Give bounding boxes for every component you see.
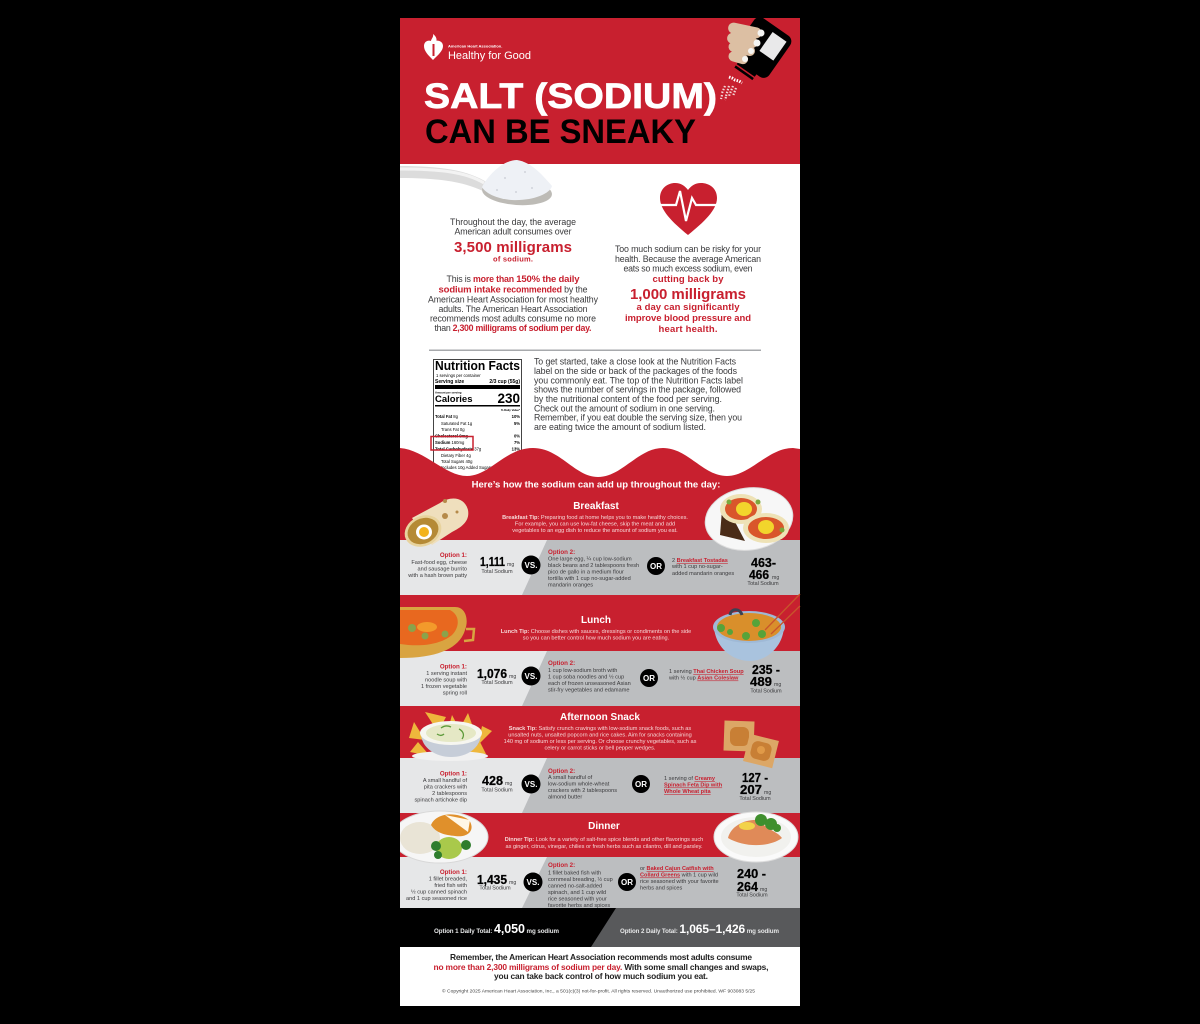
total: 463-466 mg: mg	[772, 575, 779, 581]
option 1: snack: spinach artichoke dip	[414, 798, 467, 804]
option 1: lunch: noodle soup with	[425, 678, 467, 684]
option 2: snack	[548, 768, 617, 800]
nutrition facts label: 7%	[514, 440, 520, 445]
daily totals bar	[400, 908, 800, 947]
badge: or	[618, 873, 636, 891]
option 2: lunch: stir-fry vegetables and edamame	[548, 688, 629, 694]
icon: noodle bowl	[713, 594, 800, 661]
total: 428 mg: 428	[482, 774, 503, 788]
title: SALT (SODIUM)	[424, 77, 717, 116]
option 2: dinner: rice seasoned with your	[548, 896, 607, 902]
snack tip	[504, 726, 697, 752]
nutrition facts label: 13%	[512, 446, 520, 452]
alternative: spinach feta dip	[664, 776, 723, 795]
option 1: lunch	[421, 664, 467, 696]
icon: burrito	[399, 499, 468, 553]
text block: average consumption: This is more than 150% the daily	[446, 274, 580, 285]
text block: average consumption: 3,500 milligrams	[454, 239, 572, 256]
nutrition facts label: Calories	[435, 394, 472, 405]
badge: or	[640, 669, 658, 687]
total: 240-264 mg: Total Sodium	[736, 892, 768, 898]
icon: breakfast tostadas plate	[701, 482, 797, 556]
logo: American Heart Association Healthy for Good: Healthy for Good	[448, 50, 531, 62]
option 2: dinner: favorite herbs and spices	[548, 903, 610, 909]
alternative: spinach feta dip: Spinach Feta Dip with	[664, 782, 723, 788]
option 1: snack: Option 1:	[440, 770, 467, 778]
nutrition facts label: Saturated Fat 1g	[441, 421, 473, 426]
badge: vs	[522, 666, 540, 686]
closing message: no more than 2,300 milligrams of sodium per day. With some small changes and swaps,	[434, 962, 768, 972]
text block: health risk: 1,000 milligrams	[630, 286, 746, 303]
text block: average consumption: adults. The American Heart Association	[438, 304, 588, 314]
total: 127-207 mg	[739, 771, 771, 802]
option 1: dinner	[406, 869, 467, 902]
total: 463-466 mg	[747, 556, 779, 587]
text block: average consumption: sodium intake recommended by the	[438, 284, 588, 296]
text block: average consumption: than 2,300 milligrams of sodium per day.	[434, 323, 592, 333]
option 1: dinner: Option 1:	[440, 869, 467, 876]
nutrition facts label: Serving size	[435, 379, 464, 385]
badge: vs	[522, 556, 540, 574]
nutrition facts label: Amount per serving	[435, 390, 462, 394]
option 1: lunch: 1 serving instant	[426, 671, 467, 677]
icon: chips and dip	[409, 712, 492, 761]
option 2 daily total: Option 2 Daily Total: 1,065–1,426 mg sodium	[620, 922, 779, 936]
alternative: breakfast tostadas: 2 Breakfast Tostadas	[672, 558, 728, 564]
total: 428 mg	[481, 774, 513, 794]
option 2: breakfast: One large egg, ¼ cup low-sodium	[548, 556, 632, 562]
total: 1,076 mg: mg	[509, 674, 516, 680]
closing message: Remember, the American Heart Association recommends most adults consume	[450, 952, 752, 962]
total: 428 mg: Total Sodium	[481, 788, 513, 794]
text block: health risk: heart health.	[658, 324, 718, 335]
nutrition facts label: Trans Fat 0g	[441, 427, 465, 432]
badge: vs	[522, 774, 540, 794]
nutrition facts label: 10%	[512, 414, 520, 419]
badge: or: OR	[635, 780, 647, 789]
option 1: lunch: spring roll	[443, 690, 467, 696]
total: 1,076 mg: Total Sodium	[481, 680, 513, 686]
snack tip: 140 mg of sodium or less per serving. Or choose crunchy vegetables, such as	[504, 739, 697, 745]
text block: average consumption	[428, 217, 599, 333]
lunch tip: so you can better control how much sodium you are eating.	[523, 636, 670, 642]
option 2: dinner: spinach, and 1 cup wild	[548, 890, 606, 896]
alternative: spinach feta dip: 1 serving of Creamy	[664, 776, 716, 782]
option 2: lunch: 1 cup soba noodles and ½ cup	[548, 674, 624, 680]
text block: nutrition label guidance: by the nutritional content of the food per serving.	[534, 394, 722, 404]
logo: American Heart Association Healthy for Good	[424, 34, 531, 62]
total: 240-264 mg	[736, 867, 768, 898]
total: 1,111 mg: 1,111	[480, 555, 505, 569]
total: 1,111 mg: Total Sodium	[481, 569, 513, 575]
breakfast tip: For example, you can use low-fat cheese, skip the meat and add	[515, 522, 675, 528]
option 1 daily total: Option 1 Daily Total: 4,050 mg sodium	[434, 922, 559, 936]
alternative: baked cajun catfish: rice seasoned with your favorite	[640, 879, 719, 885]
heading: sodium adds up: Here’s how the sodium can add up throughout the day:	[472, 480, 720, 490]
option 2: breakfast	[548, 549, 639, 588]
option 2: snack: low-sodium whole-wheat	[548, 782, 610, 788]
text block: health risk: health. Because the average American	[615, 254, 761, 264]
nutrition facts label: Total Carbohydrate 37g	[435, 446, 482, 452]
nutrition facts label: Includes 10g Added Sugars	[441, 465, 492, 470]
heading: dinner: Dinner	[588, 821, 620, 832]
icon: fried fish plate	[392, 811, 488, 863]
total: 463-466 mg: 466	[749, 568, 769, 582]
text block: nutrition label guidance: To get started, take a close look at the Nutrition Facts	[534, 356, 737, 366]
total: 1,435 mg: Total Sodium	[479, 886, 511, 892]
option 2: dinner: canned no-salt-added	[548, 884, 602, 890]
badge: vs: VS.	[525, 780, 537, 789]
text block: health risk: Too much sodium can be risky for your	[615, 244, 761, 254]
nutrition facts label: Nutrition Facts	[435, 359, 520, 373]
option 2: snack: A small handful of	[548, 775, 593, 781]
total: 127-207 mg: mg	[764, 790, 771, 796]
lunch tip	[501, 629, 691, 642]
total: 1,076 mg	[477, 667, 516, 686]
dinner comparison band	[400, 857, 800, 908]
logo: American Heart Association Healthy for Good: American Heart Association.	[448, 44, 502, 48]
alternative: spinach feta dip: Whole Wheat pita	[664, 789, 712, 795]
nutrition facts label: Cholesterol 0mg	[435, 434, 468, 438]
dinner tip	[505, 837, 703, 850]
icon: hand shaking salt bottle	[721, 14, 794, 100]
option 1: lunch: Option 1:	[440, 664, 467, 670]
breakfast tip: Breakfast Tip: Preparing food at home helps you to make healthy choices.	[502, 515, 688, 521]
total: 235-489 mg: mg	[774, 682, 781, 688]
heading: afternoon snack: Afternoon Snack	[560, 712, 640, 723]
icon: spoon of salt	[400, 160, 553, 207]
option 1: dinner: and 1 cup seasoned rice	[406, 896, 467, 902]
option 2: lunch	[548, 660, 631, 694]
option 1: breakfast: Option 1:	[440, 552, 467, 559]
panel: dinner	[392, 811, 800, 909]
option 2: snack: Option 2:	[548, 768, 575, 775]
text block: average consumption: recommends most adults consume no more	[430, 314, 596, 324]
total: 235-489 mg: 489	[750, 675, 772, 689]
total: 1,111 mg: mg	[507, 562, 514, 568]
breakfast tip: vegetables to an egg dish to reduce the amount of sodium you eat.	[512, 528, 678, 534]
panel: afternoon snack	[400, 712, 800, 813]
total: 463-466 mg: Total Sodium	[747, 581, 779, 587]
text block: nutrition label guidance: Check out the amount of sodium in one serving.	[534, 404, 715, 414]
breakfast tip	[502, 515, 688, 534]
total: 1,076 mg: 1,076	[477, 667, 507, 681]
total: 1,435 mg: 1,435	[477, 873, 507, 887]
total: 240-264 mg: mg	[760, 887, 767, 893]
alternative: breakfast tostadas	[671, 558, 734, 577]
badge: vs	[524, 872, 542, 892]
icon: heart with pulse line	[660, 183, 717, 235]
alternative: thai chicken soup: with ½ cup Asian Coleslaw	[668, 674, 739, 682]
option 2: snack: crackers with 2 tablespoons	[548, 788, 617, 794]
option 1: snack: A small handful of	[423, 778, 467, 784]
option 1: breakfast	[407, 552, 467, 579]
badge: or: OR	[621, 878, 633, 887]
total: 240-264 mg: 264	[737, 880, 758, 894]
option 2: dinner	[548, 862, 613, 909]
option 1: breakfast: with a hash brown patty	[407, 573, 467, 579]
alternative: baked cajun catfish: Collard Greens with 1 cup wild	[640, 872, 718, 878]
icon: soup pan	[400, 607, 474, 658]
badge: vs: VS.	[527, 878, 539, 887]
alternative: baked cajun catfish: or Baked Cajun Catfish with	[640, 866, 714, 872]
text block: health risk: improve blood pressure and	[625, 313, 751, 324]
text block: average consumption: American adult consumes over	[454, 226, 572, 236]
badge: or: OR	[643, 674, 655, 683]
title: CAN BE SNEAKY	[425, 113, 696, 151]
red wave section	[400, 448, 800, 908]
text block: average consumption: of sodium.	[493, 254, 533, 264]
panel: lunch	[400, 594, 800, 706]
alternative: breakfast tostadas: added mandarin oranges	[672, 571, 734, 577]
option 1: dinner: ½ cup canned spinach	[411, 888, 467, 896]
total: 127-207 mg: Total Sodium	[739, 796, 771, 802]
copyright: © Copyright 2025 American Heart Association, Inc., a 501(c)(3) not-for-profit. All rights reserved. Unauthorized use prohibited. WF 903083 5/25	[442, 988, 755, 994]
snack tip: Snack Tip: Satisfy crunch cravings with low-sodium snack foods, such as	[509, 726, 691, 732]
closing message: you can take back control of how much sodium you eat.	[494, 971, 708, 981]
text block: nutrition label guidance	[534, 356, 743, 432]
nutrition facts label	[431, 359, 522, 480]
option 2: lunch: Option 2:	[548, 660, 575, 667]
option 2: breakfast: Option 2:	[548, 549, 575, 556]
option 2: breakfast: pico de gallo in a medium flour	[548, 570, 624, 576]
title	[424, 77, 717, 151]
text block: nutrition label guidance: label on the side or back of the packages of the foods	[534, 366, 738, 376]
snack tip: unsalted nuts, unsalted popcorn and rice cakes. Aim for snacks containing	[508, 732, 692, 738]
nutrition facts label: 2/3 cup (55g)	[489, 379, 520, 385]
text block: nutrition label guidance: Remember, if you eat double the serving size, then you	[534, 412, 742, 422]
text block: health risk: eats so much excess sodium, even	[624, 264, 753, 274]
total: 1,435 mg: mg	[509, 880, 516, 886]
nutrition facts label: Total Fat 8g	[435, 414, 459, 419]
total: 463-466 mg: 463-	[751, 556, 776, 570]
option 2: dinner: 1 fillet baked fish with	[548, 870, 601, 876]
text block: health risk: cutting back by	[652, 274, 724, 285]
nutrition facts label: % Daily Value*	[501, 408, 521, 412]
badge: or: OR	[650, 562, 662, 571]
nutrition facts label: 0%	[514, 434, 520, 438]
nutrition facts label: Sodium 160mg	[435, 440, 465, 445]
nutrition facts label: 1 servings per container	[436, 373, 481, 378]
icon: ravioli	[723, 720, 779, 768]
nutrition facts label: 230	[497, 391, 520, 406]
dinner tip: Dinner Tip: Look for a variety of salt-free spice blends and other flavorings such	[505, 837, 703, 843]
badge: or	[647, 557, 665, 575]
lunch tip: Lunch Tip: Choose dishes with sauces, dressings or condiments on the side	[501, 629, 691, 635]
option 2: breakfast: tortilla with 1 cup no-sugar-added	[548, 576, 631, 582]
total: 127-207 mg: 207	[740, 783, 762, 797]
page panel	[400, 18, 800, 1006]
alternative: breakfast tostadas: with 1 cup no-sugar-	[671, 564, 723, 570]
option 1: snack: pita crackers with	[424, 784, 467, 790]
snack tip: celery or carrot sticks or bell pepper wedges.	[544, 746, 656, 752]
badge: or	[632, 775, 650, 793]
text block: nutrition label guidance: you commonly eat. The top of the Nutrition Facts label	[534, 376, 743, 386]
total: 127-207 mg: 127 -	[742, 771, 768, 785]
snack comparison band	[400, 758, 800, 813]
closing message	[434, 952, 768, 981]
option 2: lunch: each of frozen unseasoned Asian	[548, 681, 631, 687]
total: 428 mg: mg	[505, 781, 512, 787]
option 2: dinner: Option 2:	[548, 862, 575, 869]
badge: vs: VS.	[525, 672, 537, 681]
option 1: lunch: 1 frozen vegetable	[421, 684, 467, 690]
nutrition facts label: Total Sugars 40g	[441, 459, 473, 464]
text block: nutrition label guidance: shows the number of servings in the package, followed	[534, 384, 741, 394]
option 2: snack: almond butter	[548, 794, 582, 800]
lunch comparison band	[400, 651, 800, 706]
text block: average consumption: American Heart Association for most healthy	[428, 294, 599, 304]
heading: lunch: Lunch	[581, 615, 611, 626]
icon: baked salmon plate	[714, 812, 798, 862]
option 2: dinner: cornmeal breading, ½ cup	[548, 876, 613, 883]
total: 235-489 mg	[750, 663, 782, 694]
option 1: snack: 2 tablespoons	[432, 791, 467, 797]
option 2: breakfast: black beans and 2 tablespoons fresh	[548, 563, 639, 569]
text block: health risk	[615, 244, 761, 335]
total: 235-489 mg: 235 -	[752, 663, 780, 677]
total: 1,111 mg	[480, 555, 514, 575]
alternative: baked cajun catfish	[640, 866, 719, 892]
alternative: thai chicken soup	[668, 669, 744, 682]
option 2: breakfast: mandarin oranges	[548, 582, 593, 588]
option 1: dinner: 1 fillet breaded,	[429, 876, 467, 882]
option 1: dinner: fried fish with	[434, 883, 467, 889]
text block: average consumption: Throughout the day, the average	[450, 217, 576, 227]
alternative: baked cajun catfish: herbs and spices	[640, 886, 682, 892]
panel: breakfast	[399, 482, 800, 595]
alternative: thai chicken soup: 1 serving Thai Chicken Soup	[669, 669, 744, 675]
total: 240-264 mg: 240 -	[737, 867, 766, 881]
option 2: lunch: 1 cup low-sodium broth with	[548, 668, 617, 674]
text block: nutrition label guidance: are eating twice the amount of sodium listed.	[534, 422, 706, 432]
total: 235-489 mg: Total Sodium	[750, 688, 782, 694]
header banner	[400, 14, 800, 164]
badge: vs: VS.	[525, 561, 537, 570]
breakfast comparison band	[400, 540, 800, 595]
nutrition facts label: 5%	[514, 421, 520, 426]
option 1: snack	[414, 770, 467, 804]
text block: health risk: a day can significantly	[636, 302, 740, 313]
option 1: breakfast: and sausage burrito	[418, 566, 467, 572]
dinner tip: as ginger, citrus, vinegar, chilies or fresh herbs such as cilantro, dill and parsley.	[505, 844, 703, 850]
nutrition facts label: Dietary Fiber 4g	[441, 453, 471, 458]
total: 1,435 mg	[477, 873, 516, 892]
heading: breakfast: Breakfast	[573, 501, 619, 512]
option 1: breakfast: Fast-food egg, cheese	[411, 560, 467, 566]
